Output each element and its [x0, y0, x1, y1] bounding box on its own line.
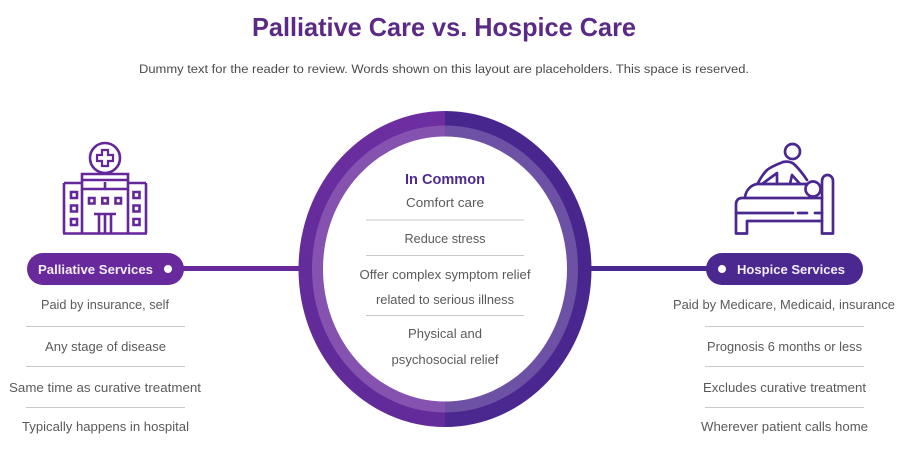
item: reduce stress: Reduce stress — [404, 231, 486, 246]
pill: palliative services: Palliative Services — [38, 262, 153, 277]
item: location: Typically happens in hospital — [22, 419, 189, 434]
icon: hospital — [63, 143, 147, 234]
item: physical and psychosocial relief: Physical and — [408, 326, 482, 341]
item: disease stage: Any stage of disease — [45, 339, 166, 354]
pill: hospice services — [706, 253, 863, 285]
panel: in common: psychosocial relief — [392, 352, 499, 367]
central ring — [298, 111, 592, 427]
item: symptom relief: Offer complex symptom relief — [360, 267, 531, 282]
item: prognosis: Prognosis 6 months or less — [707, 339, 862, 354]
item: treatment: Excludes curative treatment — [703, 380, 866, 395]
subtitle: Dummy text for the reader to review. Words shown on this layout are placeholders. This space is reserved. — [139, 62, 749, 76]
list: palliative services — [9, 297, 201, 434]
pill: hospice services: Hospice Services — [737, 262, 845, 277]
icon: patient in bed — [736, 144, 833, 234]
item: payment: Paid by Medicare, Medicaid, insurance — [673, 297, 895, 312]
title: Palliative Care vs. Hospice Care — [252, 12, 636, 42]
item: treatment: Same time as curative treatment — [9, 380, 201, 395]
connector: left — [180, 266, 300, 271]
item: location: Wherever patient calls home — [701, 419, 868, 434]
panel: in common — [360, 172, 531, 367]
item: comfort care: Comfort care — [406, 195, 484, 210]
connector: right — [590, 266, 710, 271]
panel: in common: related to serious illness — [376, 292, 514, 307]
pill: palliative services — [27, 253, 184, 285]
item: payment: Paid by insurance, self — [41, 297, 169, 312]
list: hospice services — [673, 297, 895, 434]
heading: in common: In Common — [405, 172, 485, 188]
